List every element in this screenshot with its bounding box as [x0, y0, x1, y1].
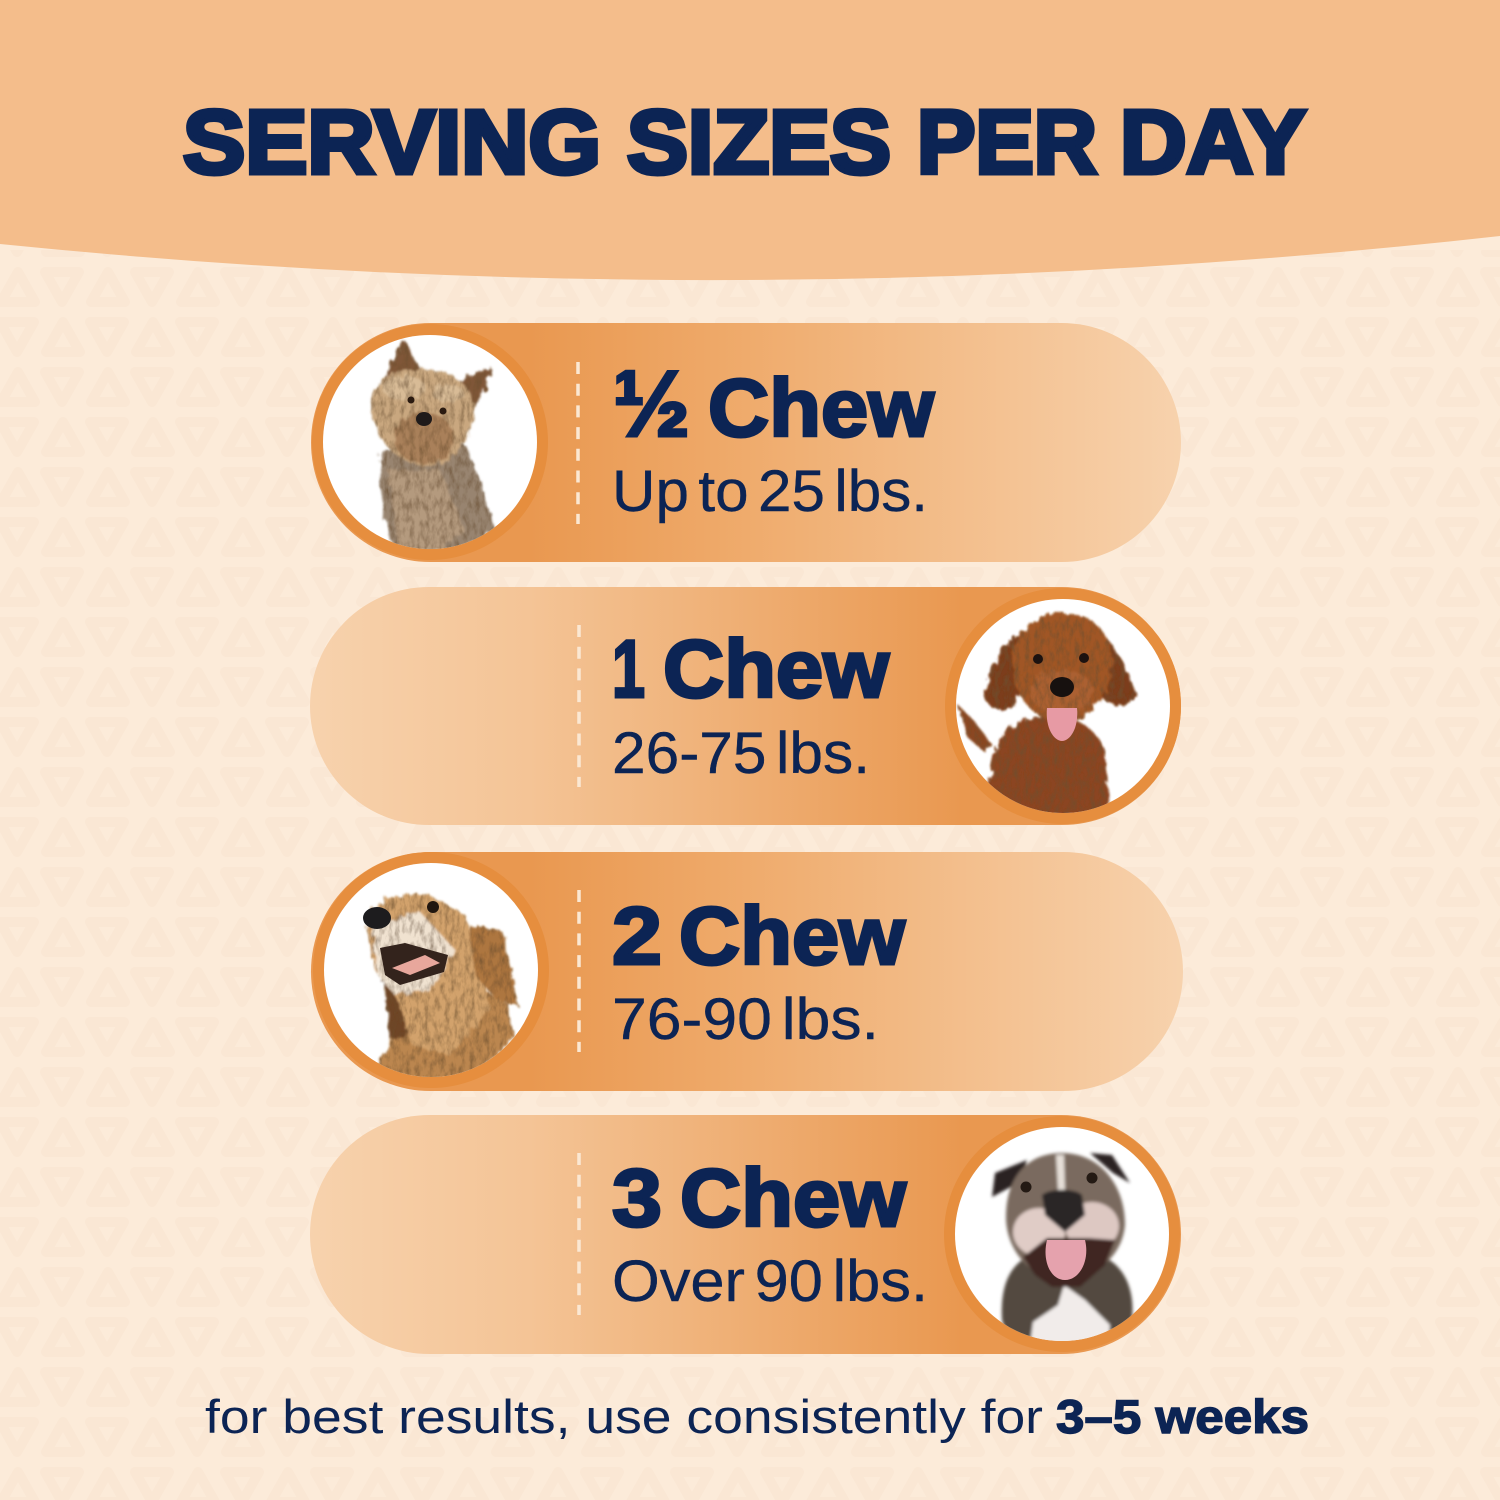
weight label: 26-75 lbs.: [612, 721, 870, 786]
footer note: [205, 1390, 1309, 1443]
icon: doodle dog: [958, 613, 1136, 825]
header band: [0, 0, 1500, 280]
panel: three chew: [310, 1115, 1181, 1354]
footer note: 3–5 weeks: [1056, 1390, 1309, 1443]
serving label: Chew: [680, 1153, 906, 1244]
serving label: 1: [612, 624, 645, 715]
divider: [576, 362, 580, 524]
icon: yorkie dog: [372, 340, 495, 556]
icon: golden retriever: [363, 893, 518, 1084]
serving label: Chew: [679, 891, 905, 982]
serving label: 3: [612, 1153, 662, 1244]
divider: [577, 1153, 581, 1315]
weight label: Up to 25 lbs.: [612, 459, 928, 524]
serving label: 2: [612, 891, 662, 982]
title: SERVING: [183, 93, 601, 193]
title: [183, 93, 1306, 193]
serving label: [613, 351, 934, 456]
serving label: Chew: [708, 363, 934, 454]
divider: [577, 625, 581, 787]
serving label: ½: [613, 351, 690, 456]
weight label: Over 90 lbs.: [612, 1249, 928, 1314]
icon: pit bull dog: [992, 1153, 1133, 1345]
footer note: for best results, use consistently for: [205, 1390, 1043, 1443]
divider: [577, 890, 581, 1052]
weight label: 76-90 lbs.: [612, 987, 879, 1052]
title: PER: [917, 93, 1097, 193]
serving label: Chew: [663, 624, 889, 715]
title: DAY: [1120, 93, 1306, 193]
panel: one chew: [310, 587, 1181, 825]
panel: two chew: [311, 852, 1183, 1091]
title: SIZES: [627, 93, 891, 193]
panel: half chew: [311, 323, 1181, 562]
